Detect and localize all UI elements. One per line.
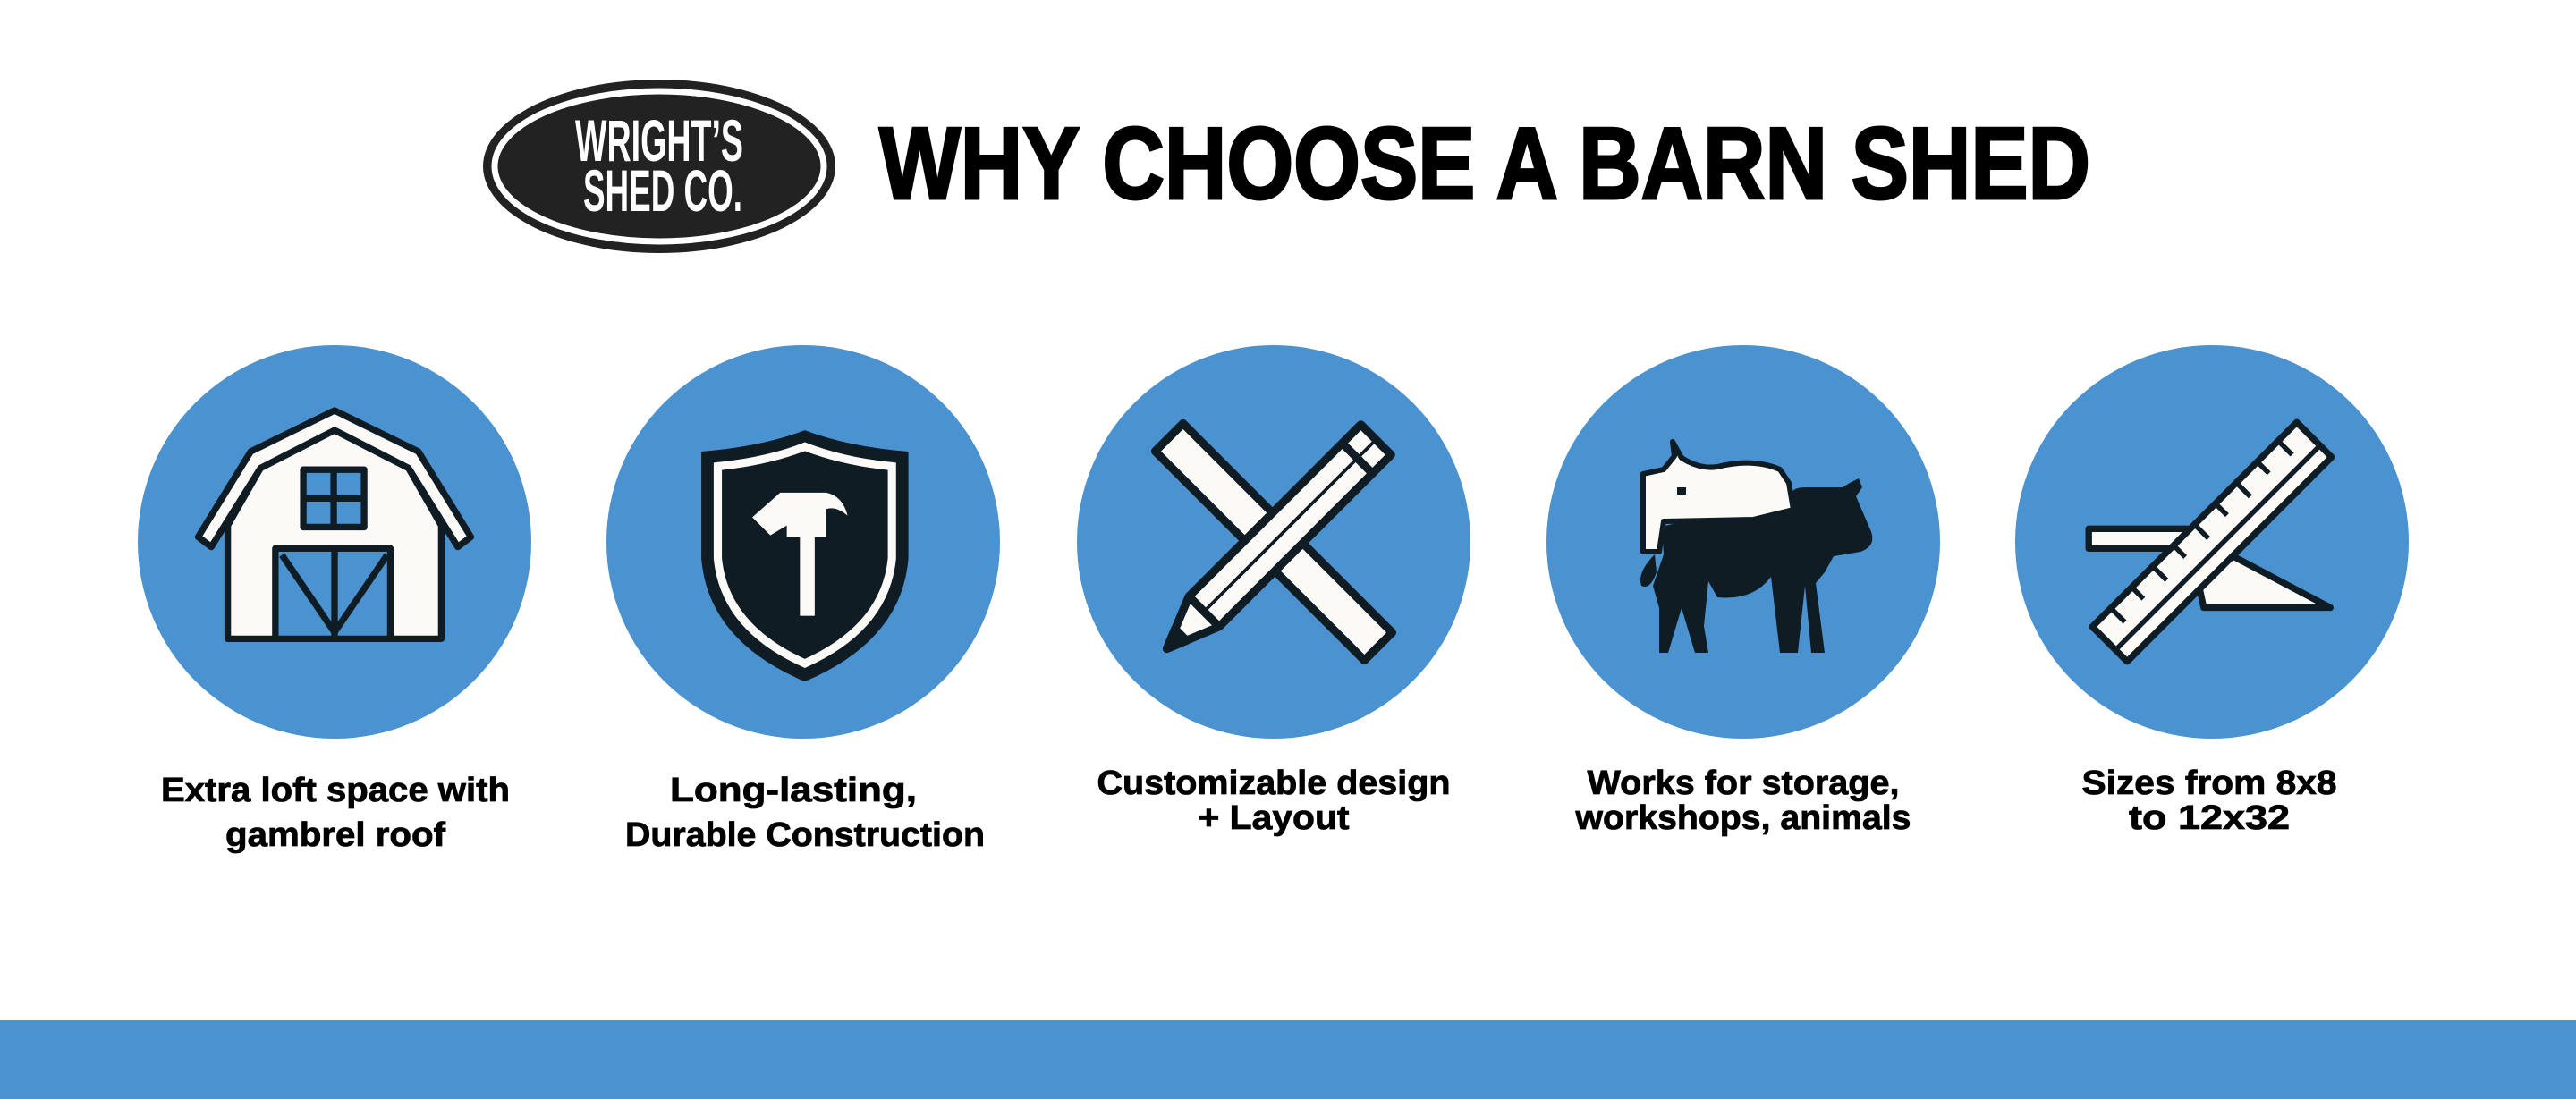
caption: customizable: Customizable design — [1097, 765, 1451, 802]
icon: shield hammer — [701, 430, 909, 681]
panel: loft space — [138, 345, 531, 739]
caption: loft — [161, 772, 510, 854]
logo — [483, 80, 835, 253]
icon: barn — [199, 410, 470, 638]
logo: WRIGHT’S — [575, 107, 743, 173]
caption: sizes — [2082, 765, 2336, 837]
logo: SHED CO. — [583, 157, 742, 224]
panel: customizable — [1077, 345, 1470, 739]
title: WHY CHOOSE A BARN SHED — [879, 107, 2090, 221]
caption: loft: gambrel roof — [225, 816, 445, 854]
footer bar — [0, 1020, 2576, 1099]
icon: ruler and triangle — [2089, 422, 2332, 662]
caption: sizes: Sizes from 8x8 — [2082, 765, 2336, 802]
caption: durable: Long-lasting, — [670, 772, 917, 809]
caption: loft: Extra loft space with — [161, 772, 510, 809]
panel: durable — [606, 345, 1000, 739]
caption: uses: Works for storage, — [1587, 765, 1900, 802]
caption: uses: workshops, animals — [1574, 799, 1911, 837]
caption: uses — [1574, 765, 1911, 837]
caption: durable: Durable Construction — [625, 816, 985, 854]
caption: customizable — [1097, 765, 1451, 837]
caption: sizes: to 12x32 — [2129, 799, 2290, 837]
caption: durable — [625, 772, 985, 854]
panel: uses — [1546, 345, 1940, 739]
icon: cow — [1640, 442, 1872, 653]
icon: pencil and ruler — [1152, 424, 1392, 664]
caption: customizable: + Layout — [1199, 799, 1350, 837]
panel: sizes — [2015, 345, 2409, 739]
